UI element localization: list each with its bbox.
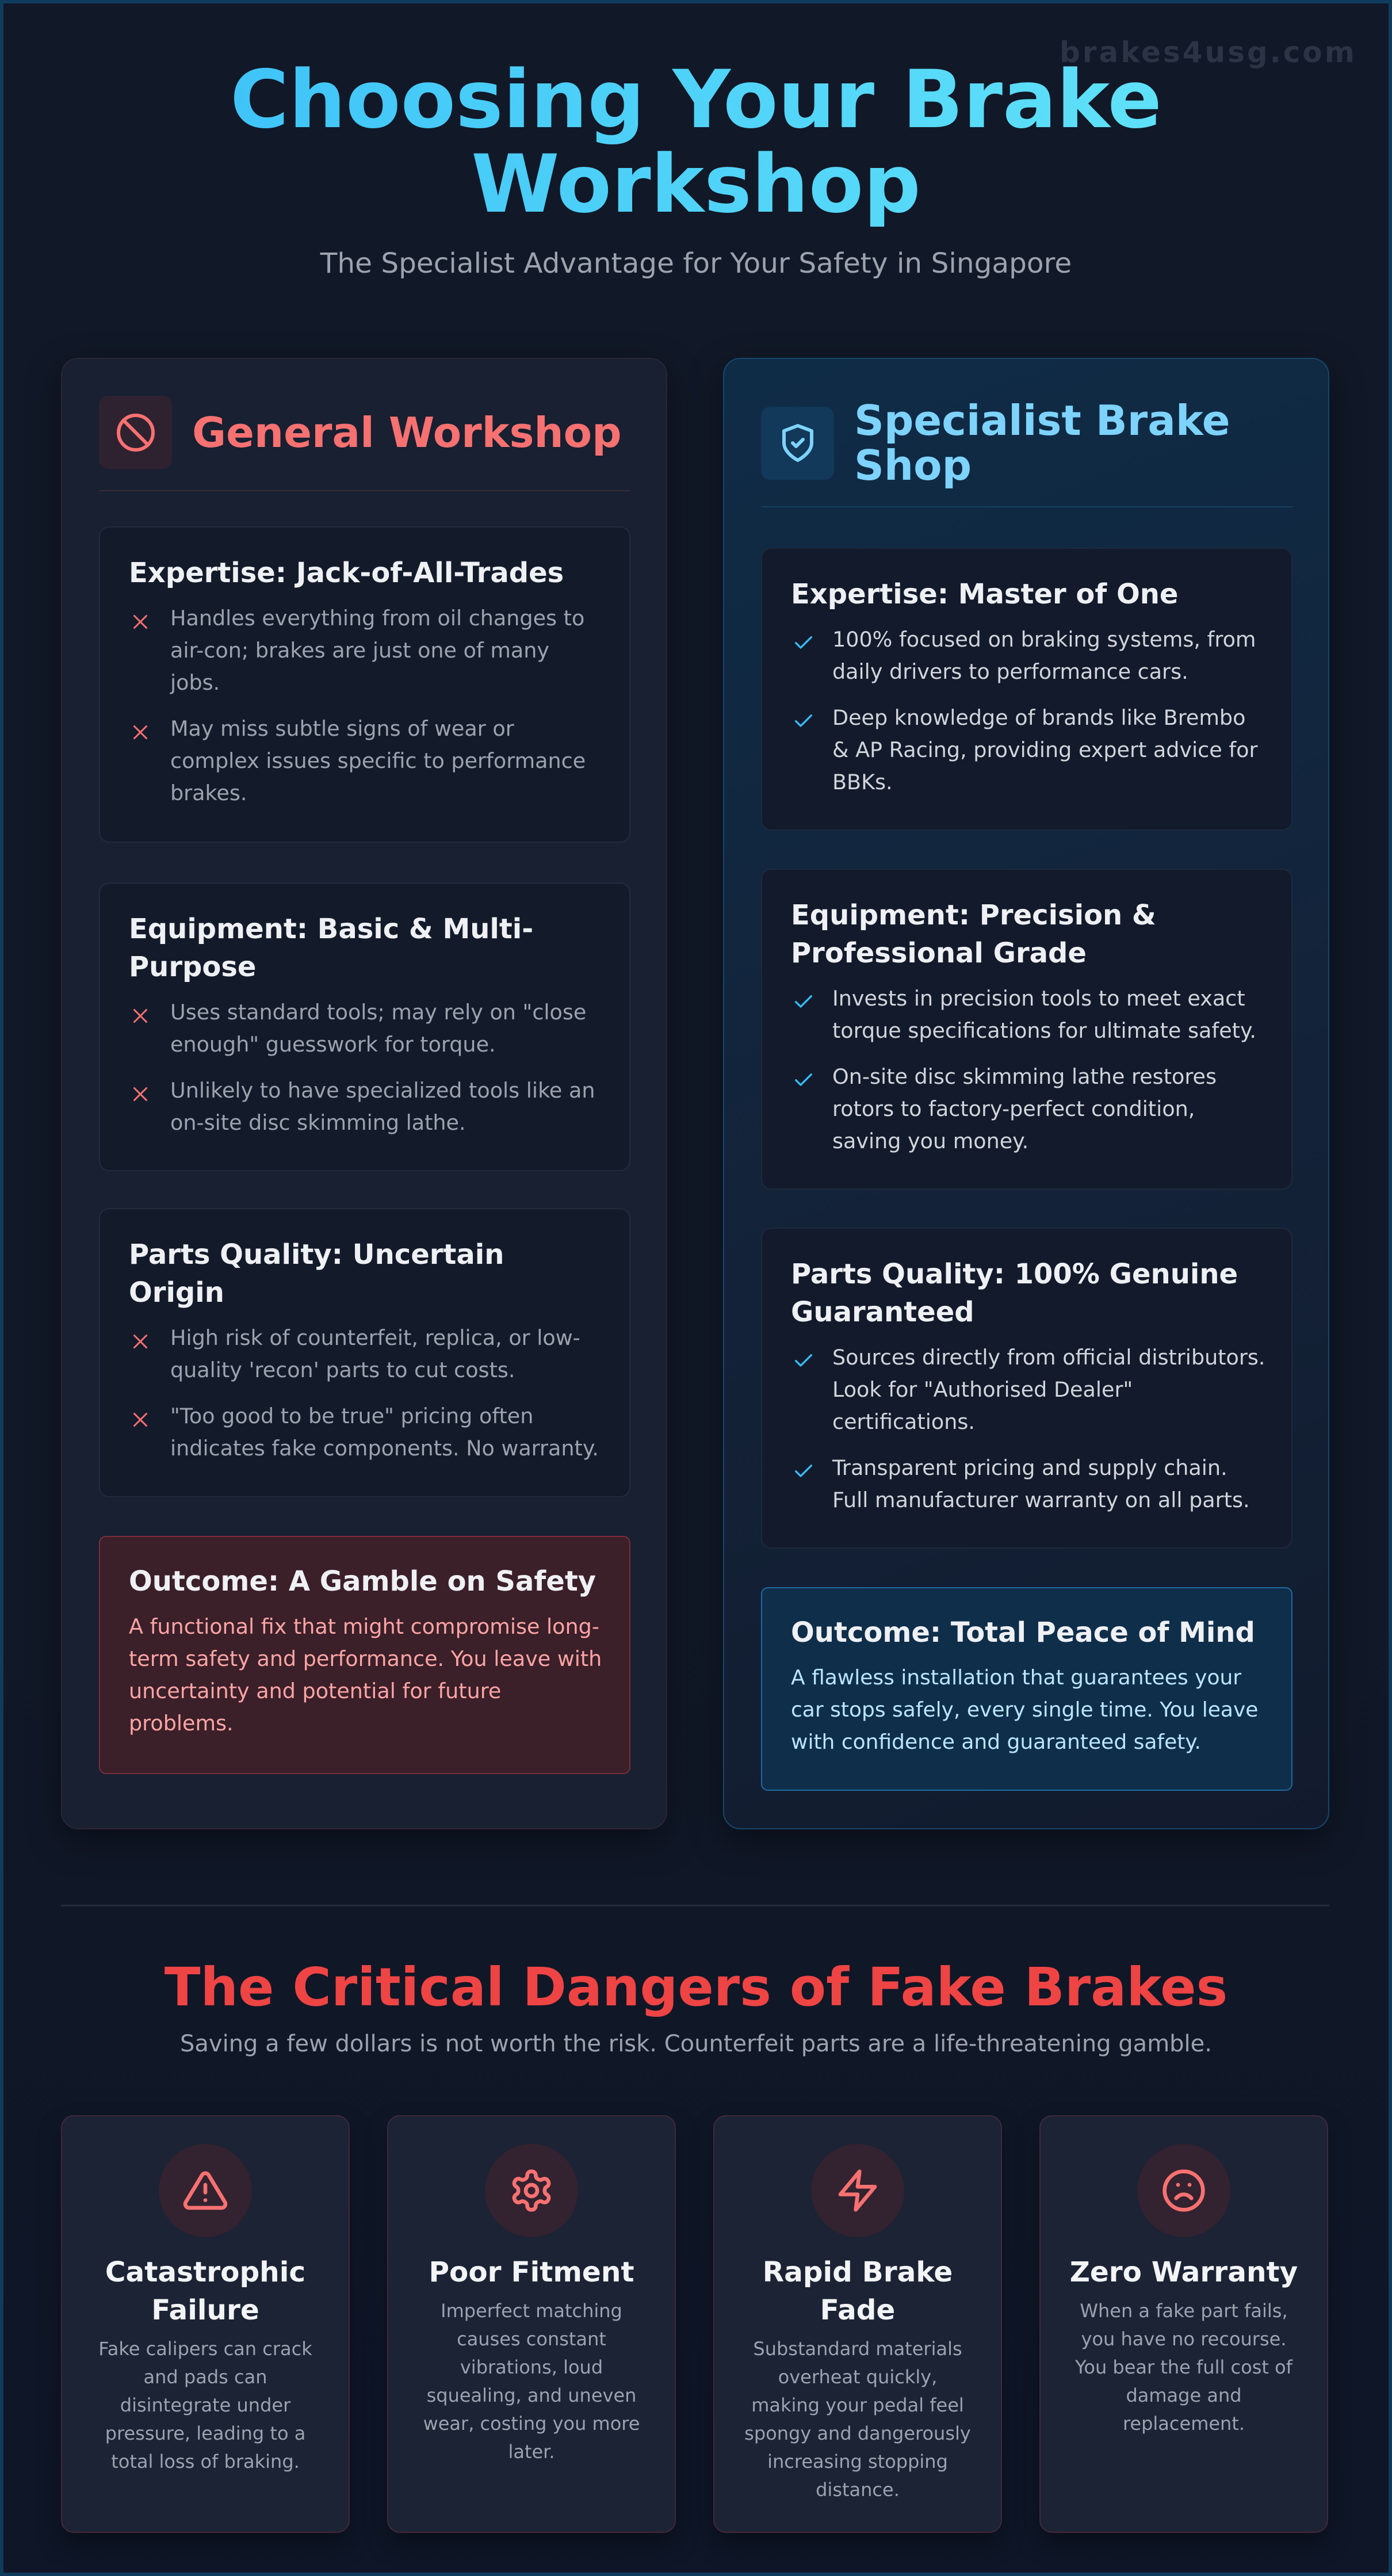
panel header: general workshop bbox=[99, 396, 622, 469]
title: Choosing Your Brake bbox=[230, 53, 1162, 146]
card: expertise bbox=[99, 526, 630, 843]
bullet: 100% focused on braking systems, from daily drivers to performance cars. bbox=[832, 627, 1256, 684]
bullet: Uses standard tools; may rely on "close enough" guesswork for torque. bbox=[170, 1000, 586, 1057]
card: parts genuine bbox=[761, 1228, 1292, 1549]
bullet: Transparent pricing and supply chain. Full manufacturer warranty on all parts. bbox=[832, 1455, 1250, 1512]
card: equipment bbox=[99, 882, 630, 1171]
card: poor fitment: Imperfect matching causes constant vibrations, loud squealing, and uneven wear, costing you more later. bbox=[423, 2300, 640, 2463]
card: catastrophic failure: Catastrophic Failure bbox=[105, 2256, 305, 2326]
heading: specialist: Shop bbox=[854, 441, 972, 490]
card: parts quality bbox=[99, 1208, 630, 1497]
card: catastrophic failure: Fake calipers can crack and pads can disintegrate under pressure, leading to a total loss of braking. bbox=[98, 2338, 312, 2472]
icon: lightning bbox=[811, 2144, 904, 2237]
bullet: Unlikely to have specialized tools like an on-site disc skimming lathe. bbox=[170, 1078, 595, 1135]
subheading: dangers: Saving a few dollars is not worth the risk. Counterfeit parts are a life-threatening gamble. bbox=[180, 2031, 1212, 2057]
bullet: Handles everything from oil changes to air-con; brakes are just one of many jobs. bbox=[170, 606, 584, 695]
bullet: Invests in precision tools to meet exact torque specifications for ultimate safety. bbox=[832, 986, 1256, 1043]
card: zero warranty: Zero Warranty bbox=[1070, 2256, 1298, 2288]
callout: outcome gamble bbox=[99, 1536, 630, 1774]
callout: outcome gamble: A functional fix that might compromise long-term safety and performance. You leave with uncertainty and potential for future problems. bbox=[129, 1614, 602, 1736]
subtitle: The Specialist Advantage for Your Safety in Singapore bbox=[320, 247, 1072, 280]
icon: warning triangle bbox=[159, 2144, 252, 2237]
bullet: Deep knowledge of brands like Brembo & AP Racing, providing expert advice for BBKs. bbox=[832, 705, 1257, 794]
panel: specialist brake shop bbox=[723, 358, 1329, 1829]
title: Workshop bbox=[471, 137, 921, 231]
title bbox=[0, 58, 1392, 227]
icon: gear bbox=[485, 2144, 578, 2237]
card: rapid brake fade bbox=[713, 2115, 1002, 2533]
card: parts genuine: Parts Quality: 100% Genuine Guaranteed bbox=[791, 1258, 1238, 1328]
bullet: "Too good to be true" pricing often indicates fake components. No warranty. bbox=[170, 1404, 599, 1461]
watermark: brakes4usg.com bbox=[1060, 36, 1357, 69]
icon: frown bbox=[1137, 2144, 1230, 2237]
card: parts quality: Parts Quality: Uncertain Origin bbox=[129, 1239, 504, 1309]
heading: specialist: Specialist Brake bbox=[854, 396, 1230, 445]
bullet: May miss subtle signs of wear or complex issues specific to performance brakes. bbox=[170, 716, 586, 805]
heading: general workshop: General Workshop bbox=[192, 408, 622, 457]
card: expertise master bbox=[761, 548, 1292, 831]
card: expertise master: Expertise: Master of One bbox=[791, 578, 1178, 610]
card: equipment precision: Equipment: Precision & Professional Grade bbox=[791, 899, 1156, 969]
card: rapid brake fade: Rapid Brake Fade bbox=[763, 2256, 953, 2326]
card: expertise: Expertise: Jack-of-All-Trades bbox=[129, 557, 564, 589]
card: catastrophic failure bbox=[61, 2115, 350, 2533]
callout: outcome gamble: Outcome: A Gamble on Safety bbox=[129, 1565, 596, 1597]
panel: general workshop bbox=[61, 358, 667, 1829]
card: equipment precision bbox=[761, 869, 1292, 1190]
bullet bbox=[795, 1345, 1265, 1434]
card: zero warranty: When a fake part fails, you have no recourse. You bear the full cost of damage and replacement. bbox=[1075, 2300, 1292, 2434]
heading: specialist bbox=[854, 396, 1230, 490]
callout: outcome peace bbox=[761, 1587, 1292, 1791]
icon: shield check bbox=[761, 406, 834, 480]
bullet: High risk of counterfeit, replica, or low-quality 'recon' parts to cut costs. bbox=[170, 1325, 580, 1382]
bullet: On-site disc skimming lathe restores rotors to factory-perfect condition, saving you money. bbox=[832, 1064, 1217, 1153]
callout: outcome peace: Outcome: Total Peace of Mind bbox=[791, 1616, 1255, 1649]
card: poor fitment: Poor Fitment bbox=[429, 2256, 634, 2288]
panel header: specialist bbox=[761, 396, 1230, 490]
callout: outcome peace: A flawless installation that guarantees your car stops safely, every single time. You leave with confidence and guaranteed safety. bbox=[791, 1666, 1258, 1754]
card: rapid brake fade: Substandard materials overheat quickly, making your pedal feel spongy and dangerously increasing stopping distance. bbox=[744, 2338, 971, 2501]
card: equipment: Equipment: Basic & Multi-Purpose bbox=[129, 913, 533, 983]
bullet: certifications. bbox=[832, 1409, 975, 1434]
heading: dangers: The Critical Dangers of Fake Brakes bbox=[165, 1956, 1227, 2018]
card: poor fitment bbox=[387, 2115, 676, 2533]
icon: ban bbox=[99, 396, 172, 469]
bullet: Sources directly from official distributors. bbox=[832, 1345, 1265, 1370]
bullet: Look for "Authorised Dealer" bbox=[832, 1377, 1133, 1402]
card: zero warranty bbox=[1039, 2115, 1328, 2533]
